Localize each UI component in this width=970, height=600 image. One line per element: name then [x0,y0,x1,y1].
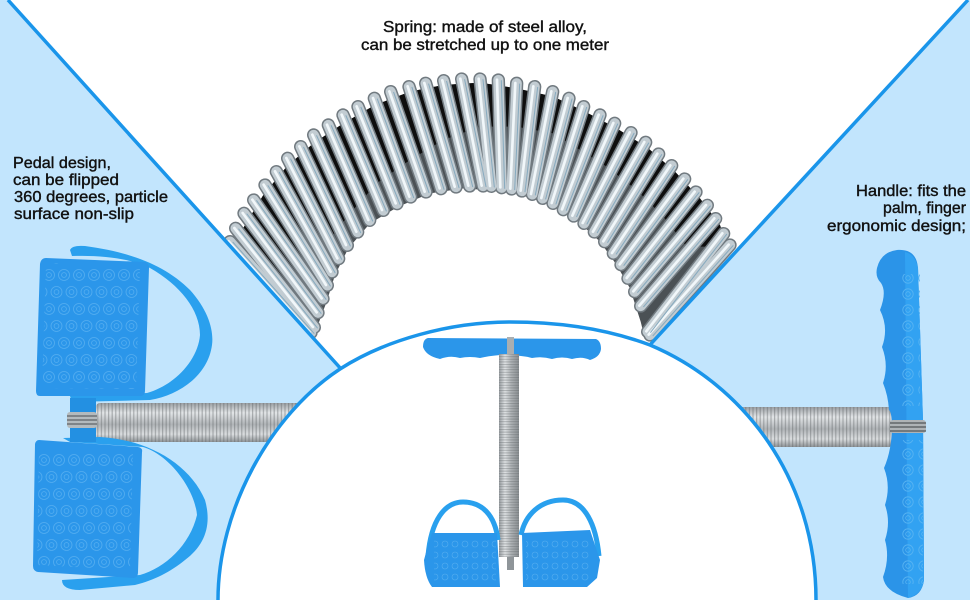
large steel spring arch [229,79,733,336]
top pedal body [36,258,149,396]
product left pedal [424,502,500,587]
product right pedal [521,500,600,587]
product handle [423,337,601,360]
bottom pedal strap [62,437,208,590]
horizontal spring close-up at pedals [96,403,306,442]
spring close-up at handle [735,407,892,447]
text: handle description: ergonomic design; [827,218,966,235]
handle close-up [876,250,926,598]
panel: left pedal background [0,0,342,600]
text: pedal design: 360 degrees, particle [14,189,168,206]
text: handle description: palm, finger [883,200,967,217]
bottom circle with product [218,322,816,600]
handle coil end [890,420,926,433]
text: pedal design: can be flipped [13,172,119,189]
left panel diagonal border [8,0,342,370]
product spring [499,354,519,570]
text: spring description: can be stretched up to one meter [361,37,610,54]
bottom pedal body [33,440,142,578]
panel: right handle background [648,0,970,600]
product: full view in circle [423,337,601,587]
text: pedal design [13,155,168,223]
text: pedal design: Pedal design, [13,155,111,172]
text: handle description: Handle: fits the [856,183,966,200]
right panel diagonal border [648,0,968,347]
text: spring description: Spring: made of steel alloy, [383,19,587,36]
pedals close-up [33,246,212,590]
text: handle description [827,183,967,235]
bottom circle border [218,322,816,600]
pedal hub and small coil [67,398,97,442]
text: pedal design: surface non-slip [14,206,134,223]
text: spring description [361,19,610,54]
top pedal strap [70,246,212,402]
